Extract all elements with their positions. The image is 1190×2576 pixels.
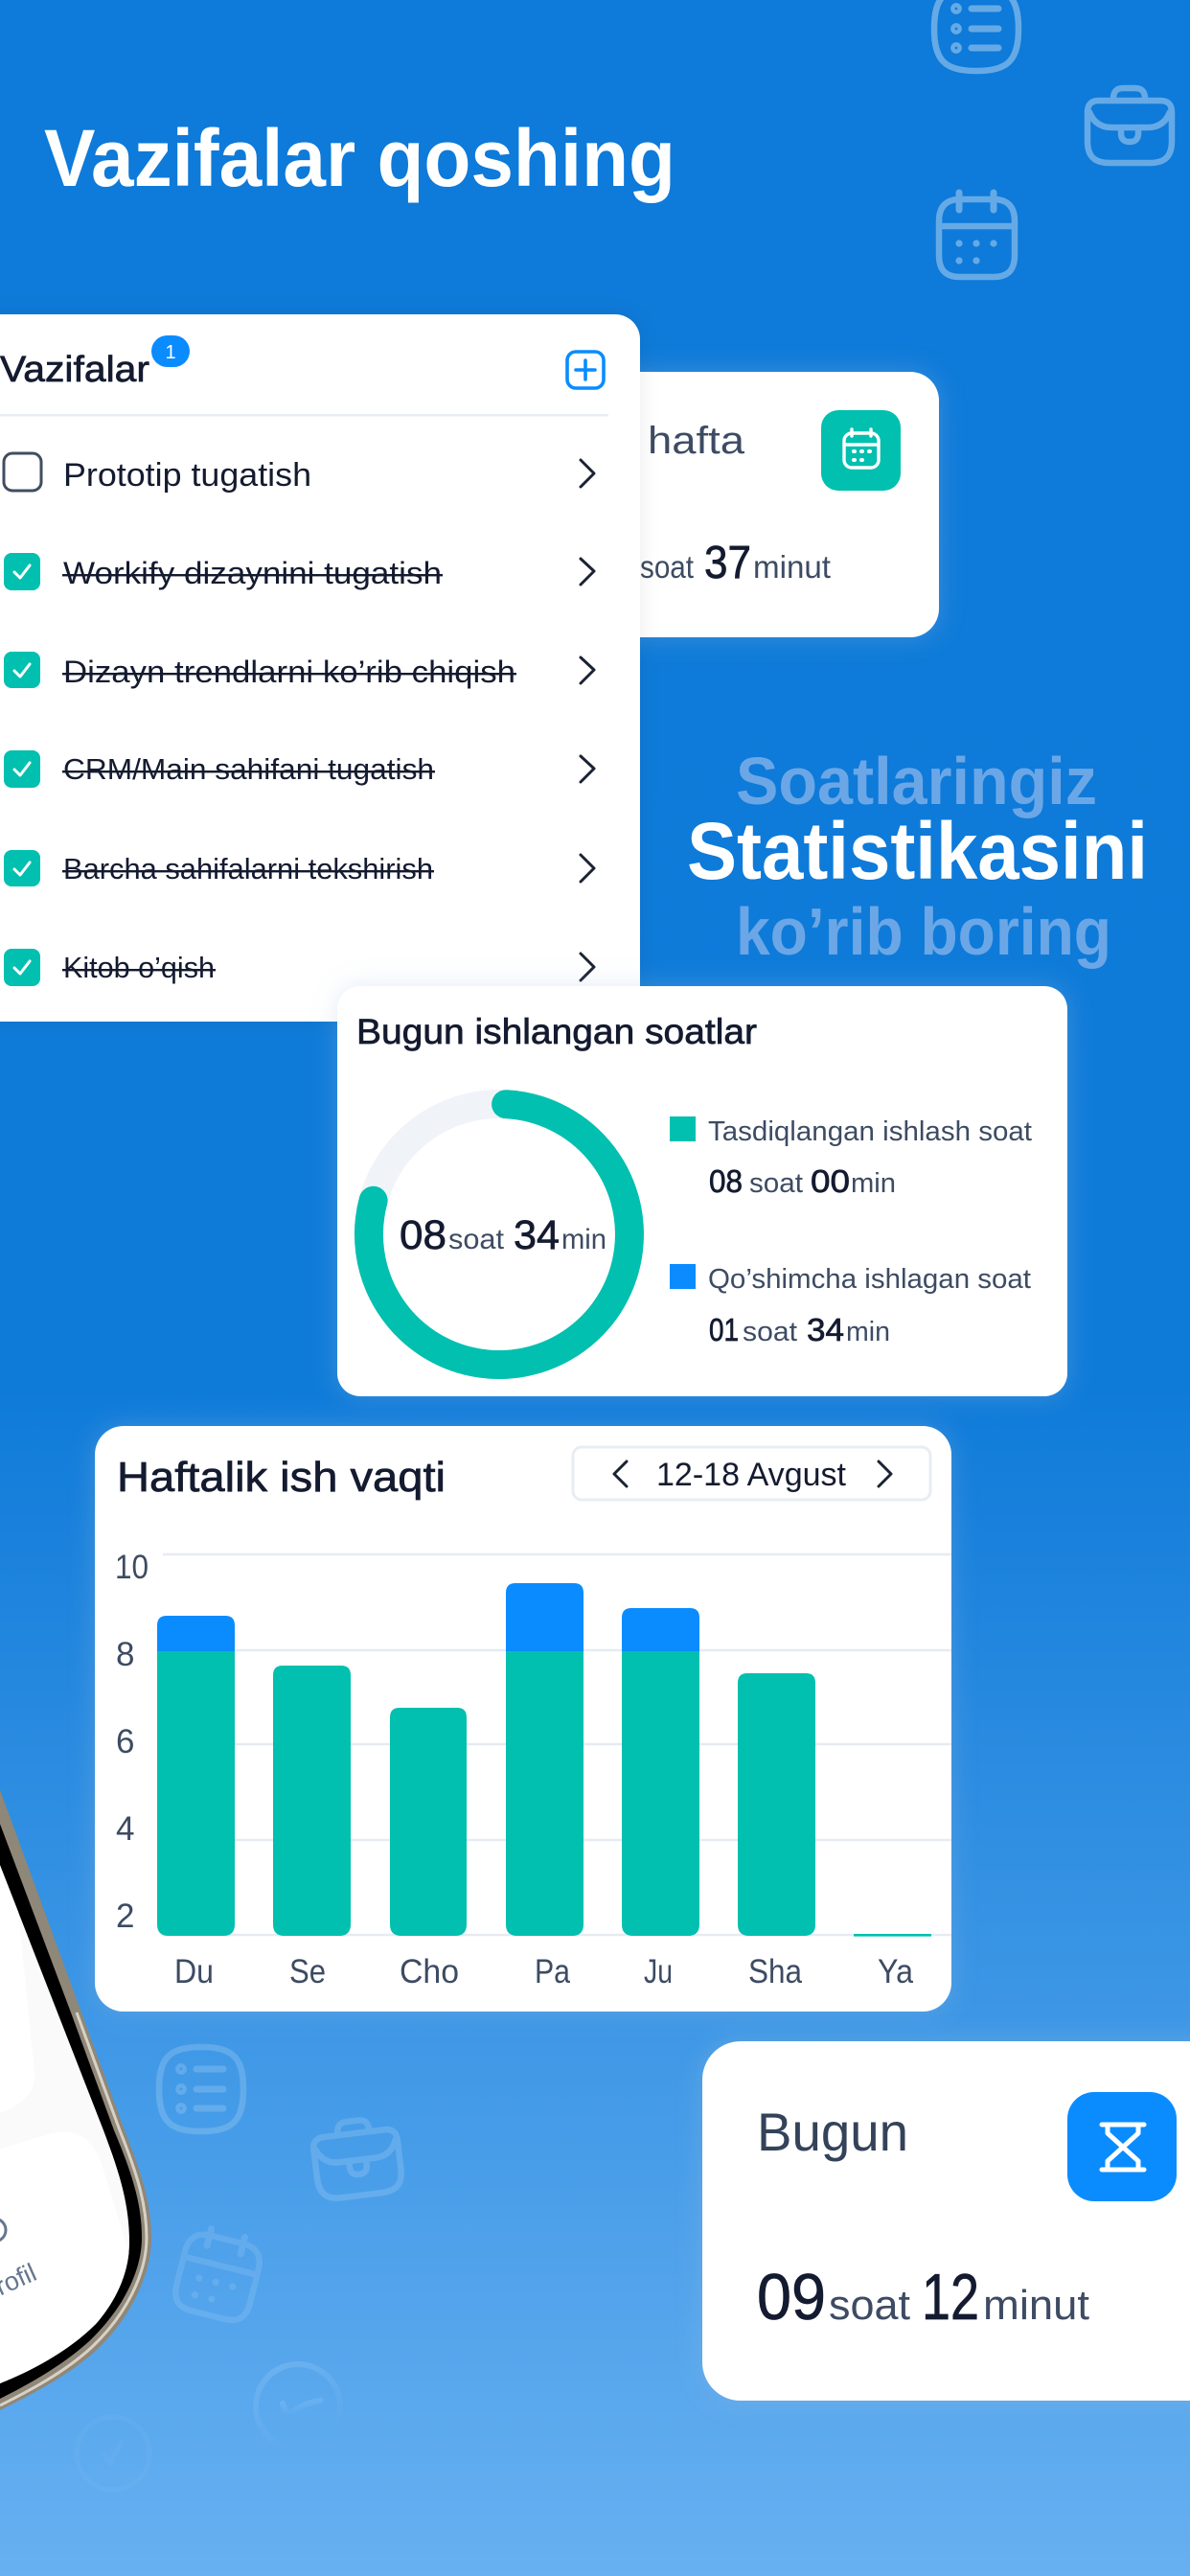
count badge	[151, 335, 190, 367]
bar: Du	[157, 1616, 235, 1936]
legend: approved hours: 08	[709, 1163, 743, 1199]
count badge: 1	[165, 342, 176, 363]
task row 6: Kitob o’qish	[63, 951, 215, 984]
task row 6	[4, 949, 594, 986]
icon: add button	[567, 352, 604, 388]
task row 1: Prototip tugatish	[63, 457, 311, 494]
week total	[640, 538, 831, 588]
legend: approved hours	[670, 1116, 1032, 1199]
task row 4	[4, 750, 594, 788]
icon: list top	[934, 0, 1018, 71]
icon: calendar top	[939, 193, 1015, 277]
week total: minut	[753, 549, 831, 585]
x axis labels	[174, 1953, 913, 1990]
today value: 09	[757, 2261, 826, 2334]
legend: overtime hours: Qo’shimcha ishlagan soat	[708, 1264, 1031, 1295]
bar: Cho	[390, 1708, 467, 1936]
today value: soat	[829, 2282, 910, 2329]
task row 1	[4, 453, 594, 494]
icon: briefcase top	[1087, 88, 1172, 163]
donut centre value: min	[561, 1224, 606, 1255]
x axis labels: Ya	[878, 1953, 913, 1990]
x axis labels: Se	[289, 1953, 326, 1990]
legend: overtime hours: min	[846, 1317, 890, 1347]
panel: today total card	[702, 2041, 1190, 2401]
donut chart	[369, 1104, 629, 1365]
donut centre value: 08	[400, 1212, 446, 1258]
legend: approved hours: 00	[811, 1163, 850, 1199]
chart heading: Haftalik ish vaqti	[117, 1454, 446, 1501]
title: Vazifalar qoshing	[44, 113, 675, 203]
tasks heading: Vazifalar	[0, 350, 149, 390]
y axis labels: 10	[115, 1549, 149, 1586]
legend: approved hours: min	[851, 1168, 896, 1199]
icon: clock small	[77, 2417, 149, 2490]
legend: overtime hours: soat	[743, 1317, 797, 1347]
x axis labels: Sha	[748, 1953, 802, 1990]
week label: hafta	[648, 420, 745, 462]
y axis labels: 6	[116, 1723, 134, 1760]
bar: Se	[273, 1666, 351, 1936]
date selector: 12-18 Avgust	[656, 1457, 847, 1493]
y axis labels: 2	[116, 1898, 134, 1935]
x axis labels: Pa	[535, 1953, 570, 1990]
donut centre value: 34	[514, 1212, 560, 1258]
today value: 12	[922, 2261, 979, 2334]
y axis labels: 4	[116, 1810, 134, 1848]
statistics heading: Statistikasini	[687, 806, 1148, 896]
panel: tasks card	[0, 314, 640, 1022]
icon: calendar bottom	[172, 2224, 265, 2324]
panel: today worked hours	[337, 986, 1067, 1396]
task row 3	[4, 652, 594, 689]
legend: overtime hours: 01	[709, 1312, 739, 1347]
task row 5: Barcha sahifalarni tekshirish	[63, 852, 433, 886]
x axis labels: Du	[174, 1953, 214, 1990]
week total: soat	[640, 549, 694, 585]
x axis labels: Ju	[644, 1953, 673, 1990]
task row 4: CRM/Main sahifani tugatish	[63, 752, 434, 786]
icon: hourglass	[1067, 2092, 1177, 2201]
card heading: Bugun ishlangan soatlar	[356, 1012, 757, 1051]
legend: approved hours: Tasdiqlangan ishlash soat	[708, 1116, 1032, 1147]
today label: Bugun	[757, 2102, 908, 2162]
date selector	[573, 1447, 930, 1500]
bar: Pa	[506, 1583, 584, 1936]
y axis labels: 8	[116, 1636, 134, 1673]
task row 2: Workify dizaynini tugatish	[63, 556, 442, 590]
bar: Ya	[854, 1934, 931, 1937]
bar: Ju	[622, 1608, 699, 1936]
legend: overtime hours: 34	[807, 1312, 844, 1347]
bar: Sha	[738, 1673, 815, 1936]
task row 5	[4, 850, 594, 886]
donut centre value: soat	[448, 1224, 505, 1255]
today value: minut	[983, 2282, 1089, 2329]
x axis labels: Cho	[400, 1953, 459, 1990]
legend: overtime hours	[670, 1264, 1031, 1347]
week total: 37	[704, 538, 751, 588]
panel: weekly work time chart	[95, 1426, 951, 2012]
icon: clock large	[256, 2364, 340, 2449]
icon: briefcase bottom	[310, 2116, 403, 2200]
y axis labels	[115, 1549, 149, 1935]
task row 2	[4, 553, 594, 590]
statistics heading	[687, 744, 1148, 969]
legend: approved hours: soat	[749, 1168, 803, 1199]
statistics heading: ko’rib boring	[736, 894, 1111, 969]
icon: list bottom	[159, 2047, 243, 2131]
donut centre value	[400, 1212, 606, 1258]
icon: calendar badge	[821, 410, 901, 491]
phone mockup	[0, 1790, 151, 2410]
panel: this week card	[537, 372, 939, 637]
today value	[757, 2261, 1089, 2334]
statistics heading: Soatlaringiz	[736, 744, 1097, 818]
task row 3: Dizayn trendlarni ko’rib chiqish	[63, 655, 515, 689]
